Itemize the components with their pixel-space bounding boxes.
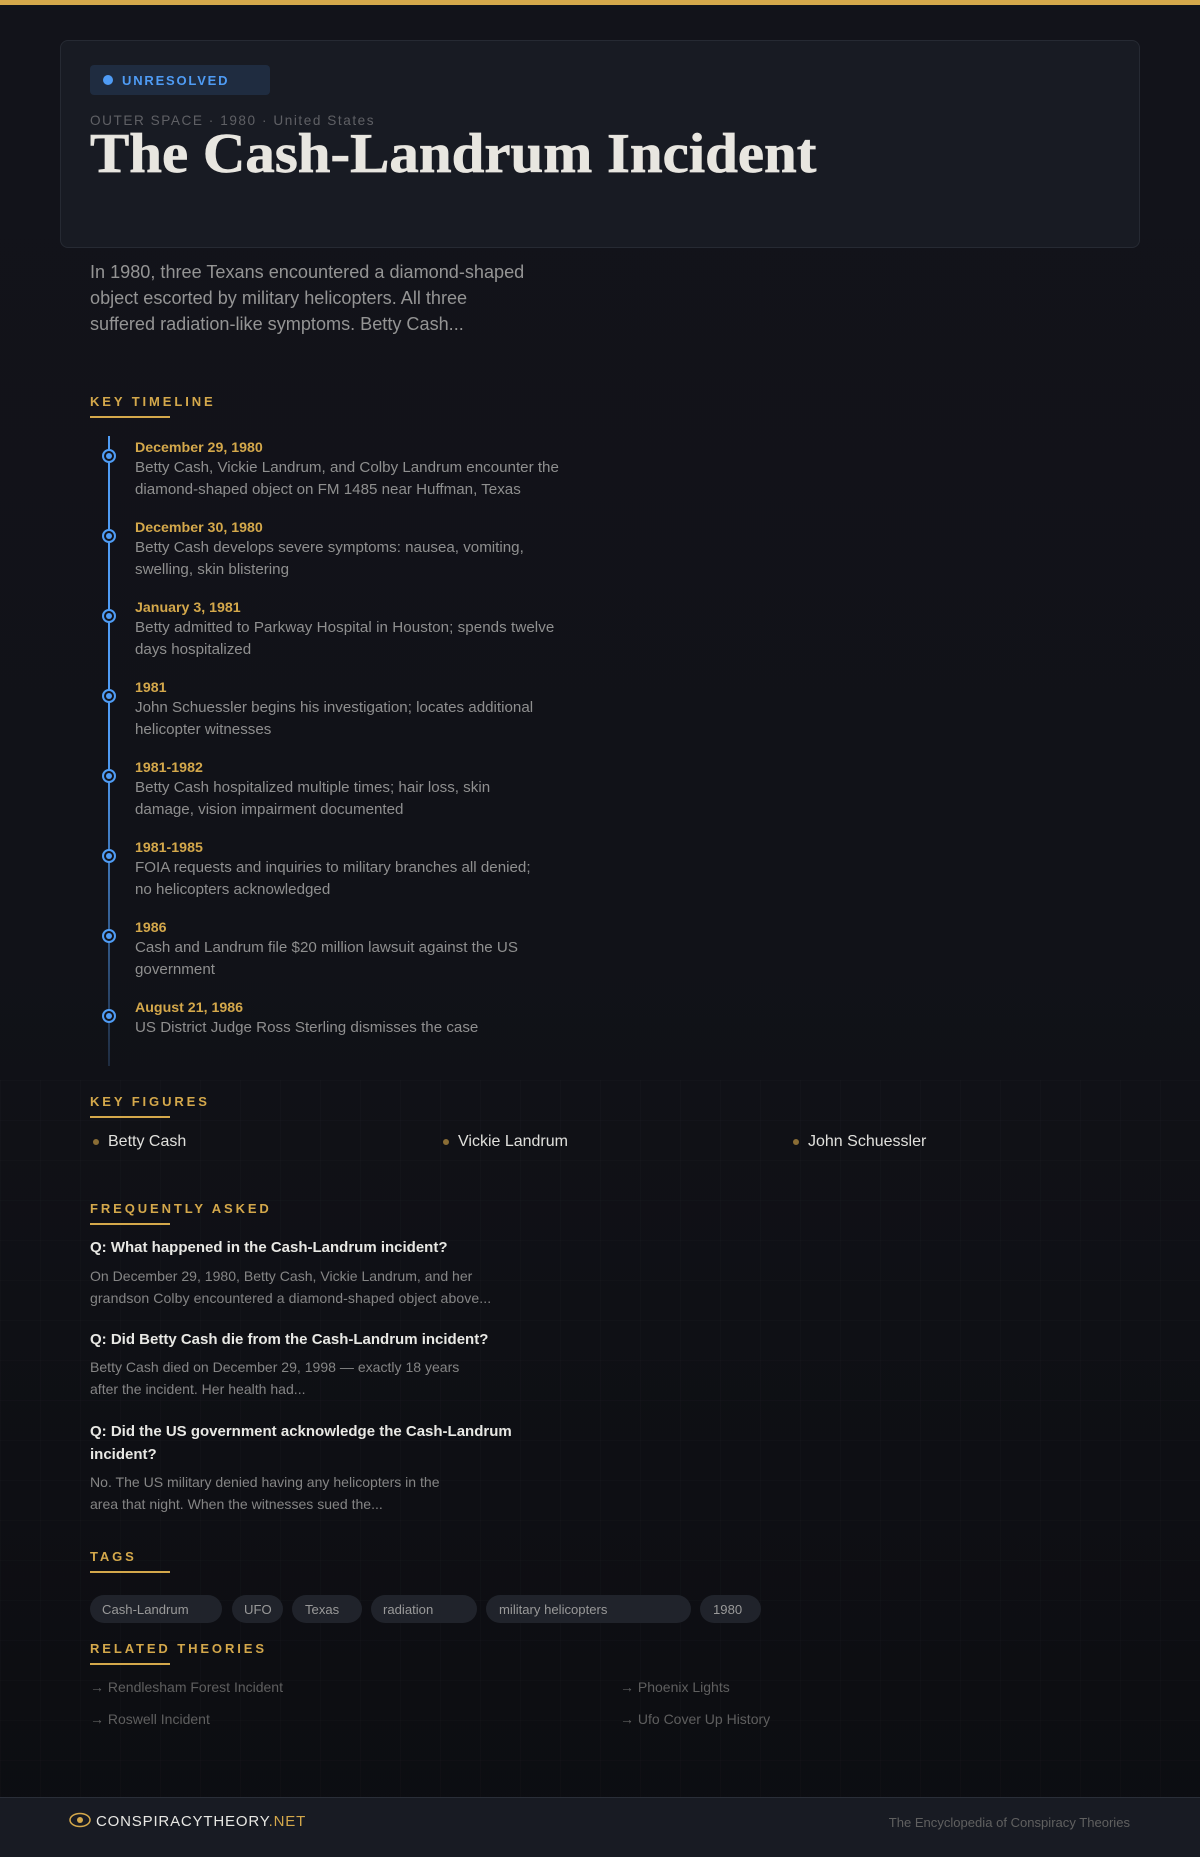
event: 1986: Cash and Landrum file $20 million lawsuit against the US <box>135 939 518 956</box>
tag: UFO <box>244 1602 272 1617</box>
tag: Texas <box>305 1602 339 1617</box>
footer brand: CONSPIRACYTHEORY.NET <box>96 1813 306 1830</box>
event: December 29, 1980 <box>102 440 559 498</box>
event: December 29, 1980: Betty Cash, Vickie Landrum, and Colby Landrum encounter the <box>135 459 559 476</box>
tag <box>292 1595 362 1623</box>
figure: Vickie Landrum: Vickie Landrum <box>458 1133 568 1150</box>
meta line: OUTER SPACE · 1980 · United States <box>90 113 375 128</box>
event: 1981-1985 <box>102 840 531 898</box>
footer tagline: The Encyclopedia of Conspiracy Theories <box>889 1815 1130 1830</box>
top accent bar <box>0 0 1200 5</box>
panel: timeline <box>102 436 559 1066</box>
status badge: unresolved <box>90 65 270 95</box>
question 2: Q: Did Betty Cash die from the Cash-Landrum incident? <box>90 1331 488 1348</box>
answer 2 <box>90 1359 459 1397</box>
event: August 21, 1986: August 21, 1986 <box>135 1000 243 1016</box>
icon: status dot <box>103 75 113 85</box>
answer 2: after the incident. Her health had... <box>90 1381 306 1397</box>
event: December 30, 1980: Betty Cash develops severe symptoms: nausea, vomiting, <box>135 539 524 556</box>
event: January 3, 1981 <box>102 600 554 658</box>
answer 3 <box>90 1474 440 1512</box>
timeline axis <box>108 436 110 1066</box>
answer 1: grandson Colby encountered a diamond-shaped object above... <box>90 1290 491 1306</box>
event: 1986: 1986 <box>135 920 167 936</box>
tag: 1980 <box>713 1602 742 1617</box>
panel: footer <box>0 1797 1200 1857</box>
event: January 3, 1981: Betty admitted to Parkway Hospital in Houston; spends twelve <box>135 619 554 636</box>
event: January 3, 1981: January 3, 1981 <box>135 600 241 616</box>
event: 1981-1985: no helicopters acknowledged <box>135 881 330 898</box>
intro paragraph: In 1980, three Texans encountered a diamond-shaped <box>90 262 524 282</box>
event: 1981-1985: FOIA requests and inquiries to military branches all denied; <box>135 859 531 876</box>
event: 1981 <box>102 680 533 738</box>
event: December 29, 1980: diamond-shaped object on FM 1485 near Huffman, Texas <box>135 481 521 498</box>
event: 1986 <box>102 920 518 978</box>
intro paragraph: object escorted by military helicopters. All three <box>90 288 467 308</box>
answer 3: area that night. When the witnesses sued the... <box>90 1496 383 1512</box>
figure: John Schuessler: John Schuessler <box>808 1133 926 1150</box>
event: 1981: 1981 <box>135 680 167 696</box>
badge label: UNRESOLVED <box>122 73 229 88</box>
related link: → Phoenix Lights <box>620 1679 730 1695</box>
answer 1 <box>90 1268 491 1306</box>
tag <box>371 1595 477 1623</box>
event: August 21, 1986 <box>102 1000 478 1036</box>
answer 3: No. The US military denied having any helicopters in the <box>90 1474 440 1490</box>
event: 1981-1982 <box>102 760 490 818</box>
event: 1981: helicopter witnesses <box>135 721 271 738</box>
intro paragraph: suffered radiation-like symptoms. Betty Cash... <box>90 314 464 334</box>
question 1: Q: What happened in the Cash-Landrum incident? <box>90 1239 448 1256</box>
question 3 <box>90 1423 512 1463</box>
event: 1981: John Schuessler begins his investigation; locates additional <box>135 699 533 716</box>
event: 1981-1982: 1981-1982 <box>135 760 203 776</box>
answer 2: Betty Cash died on December 29, 1998 — exactly 18 years <box>90 1359 459 1375</box>
event: December 30, 1980: swelling, skin blistering <box>135 561 289 578</box>
event: January 3, 1981: days hospitalized <box>135 641 251 658</box>
heading: frequently asked: FREQUENTLY ASKED <box>90 1201 272 1216</box>
heading: key figures: KEY FIGURES <box>90 1094 210 1109</box>
question 3: incident? <box>90 1446 157 1463</box>
related link: → Rendlesham Forest Incident <box>90 1679 283 1695</box>
question 3: Q: Did the US government acknowledge the Cash-Landrum <box>90 1423 512 1440</box>
event: 1986: government <box>135 961 215 978</box>
answer 1: On December 29, 1980, Betty Cash, Vickie Landrum, and her <box>90 1268 472 1284</box>
event: 1981-1982: damage, vision impairment documented <box>135 801 403 818</box>
event: 1981-1985: 1981-1985 <box>135 840 203 856</box>
title: The Cash-Landrum Incident <box>90 123 816 185</box>
tag: Cash-Landrum <box>102 1602 189 1617</box>
tag <box>232 1595 283 1623</box>
tag <box>486 1595 691 1623</box>
tag: radiation <box>383 1602 433 1617</box>
event: 1981-1982: Betty Cash hospitalized multiple times; hair loss, skin <box>135 779 490 796</box>
figure: Betty Cash: Betty Cash <box>108 1133 186 1150</box>
event: December 30, 1980 <box>102 520 524 578</box>
intro paragraph <box>90 262 524 334</box>
event: August 21, 1986: US District Judge Ross Sterling dismisses the case <box>135 1019 478 1036</box>
tag <box>90 1595 222 1623</box>
panel: header card <box>60 40 1140 248</box>
heading: tags: TAGS <box>90 1549 137 1564</box>
related link: → Ufo Cover Up History <box>620 1711 770 1727</box>
icon: eye logo <box>69 1812 91 1828</box>
tag <box>700 1595 761 1623</box>
heading: key timeline: KEY TIMELINE <box>90 394 216 409</box>
tag: military helicopters <box>499 1602 607 1617</box>
heading: related theories: RELATED THEORIES <box>90 1641 267 1656</box>
event: December 30, 1980: December 30, 1980 <box>135 520 263 536</box>
related link: → Roswell Incident <box>90 1711 210 1727</box>
event: December 29, 1980: December 29, 1980 <box>135 440 263 456</box>
